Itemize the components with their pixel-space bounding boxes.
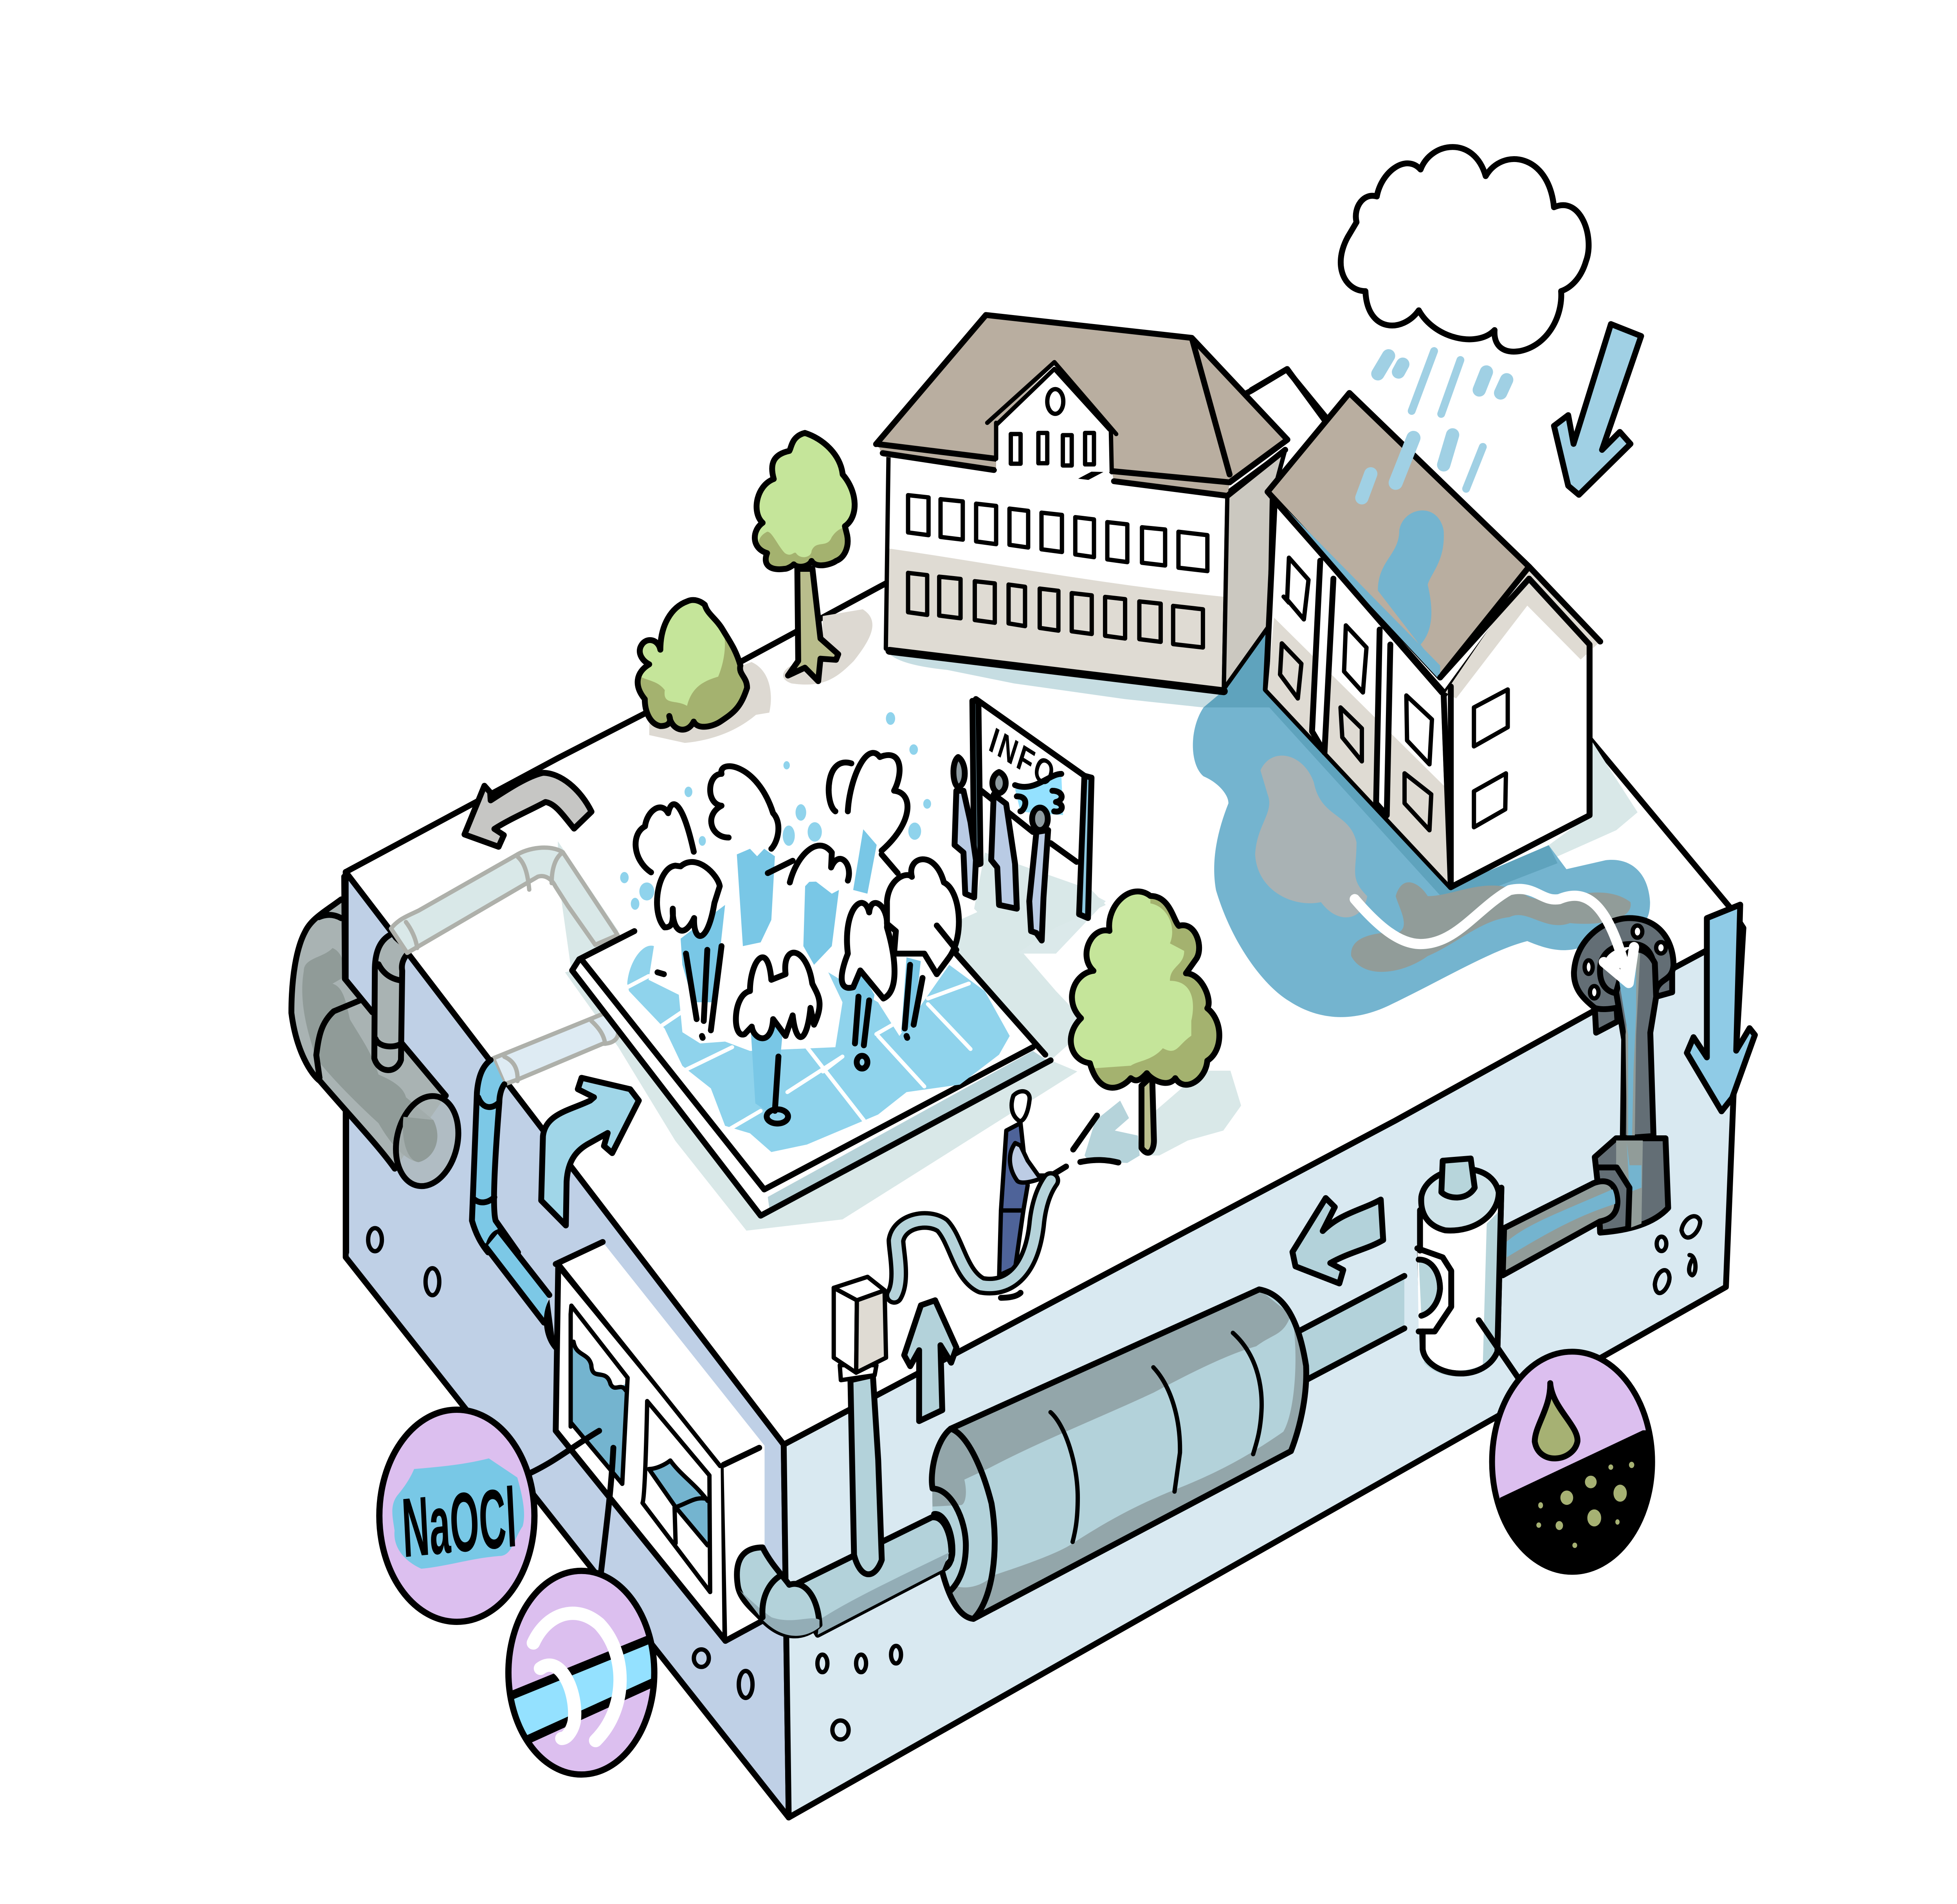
detail circle: NaOCl: NaOCl [400, 1470, 519, 1575]
arrow: left on right face [1292, 1198, 1383, 1283]
detail circle: sediment and droplet [1489, 1349, 1655, 1575]
board [976, 699, 1085, 883]
control box [840, 1365, 876, 1380]
water columns [652, 815, 921, 1115]
back corner outline of top face [1252, 369, 1324, 420]
windows: flooded house [1280, 558, 1508, 830]
info board with visitors [953, 699, 1106, 954]
box: top face [346, 369, 1743, 1445]
inlet pipe with flange [1503, 918, 1674, 1275]
splash on board [1015, 774, 1063, 815]
tree: bush [637, 600, 771, 743]
light pipe crossing the top face [391, 848, 618, 1084]
visitors [953, 757, 965, 787]
windows: lower row [908, 573, 1203, 647]
tree: front tree [1071, 892, 1241, 1163]
pool with fountains [572, 712, 1051, 1216]
arrow: rain direction [1554, 324, 1641, 495]
puddle: grey dirt patch [1255, 756, 1367, 917]
puddle of flood water [1193, 627, 1650, 1017]
person with hose spraying [999, 1091, 1066, 1298]
left corner edge redraw [344, 877, 346, 1252]
rain drops [1362, 351, 1506, 498]
blue feed pipe lower run [487, 1231, 548, 1327]
tank window: NaOCl [573, 1344, 626, 1484]
gable windows [1011, 433, 1094, 465]
arrow: grey curved back [465, 773, 591, 847]
arrow: blue curved up [541, 1078, 639, 1225]
building: flooded house [1266, 393, 1600, 887]
arrow: down into system [1687, 904, 1755, 1111]
vertical riser [374, 935, 409, 1072]
water surface [627, 946, 1010, 1152]
cylinder filter tank [932, 1276, 1404, 1619]
arrow: up small [904, 1300, 957, 1421]
ground shadows [558, 645, 1638, 1230]
holes: right of face [1655, 1216, 1700, 1293]
elbow [1595, 1138, 1668, 1233]
pool slab [572, 931, 1051, 1216]
dosing cabinet [530, 1242, 764, 1641]
tree: back tree [755, 433, 872, 685]
separator tank [1417, 1158, 1519, 1379]
info board text: INFO [985, 720, 1061, 796]
blue feed pipe on left face [472, 1060, 518, 1252]
gable round window [1047, 389, 1063, 414]
building: main school house [876, 315, 1287, 691]
leader lines [530, 1431, 613, 1573]
box: right side face [784, 928, 1743, 1818]
rain cloud [1341, 147, 1589, 351]
droplets [620, 712, 931, 910]
outlet pipe [1503, 1181, 1618, 1275]
lower light pipe [493, 1013, 618, 1084]
outlet pipe with elbow and riser [737, 1277, 951, 1636]
windows: upper row [908, 495, 1207, 571]
puddle: dark stream [1351, 882, 1631, 972]
pilasters [1312, 561, 1333, 752]
tank window: basin [649, 1461, 708, 1543]
spray clouds [636, 753, 959, 1038]
detail circle: UV pipe [499, 1571, 656, 1774]
detail circle: NaOCl [379, 1410, 534, 1622]
hose [894, 1180, 1051, 1295]
exclamation strokes [658, 946, 923, 1111]
holes: front corner [368, 1228, 901, 1740]
arrow: white flow to inlet [1355, 889, 1634, 983]
big grey pipe at back-left [291, 898, 470, 1201]
box: left side face [346, 872, 789, 1818]
